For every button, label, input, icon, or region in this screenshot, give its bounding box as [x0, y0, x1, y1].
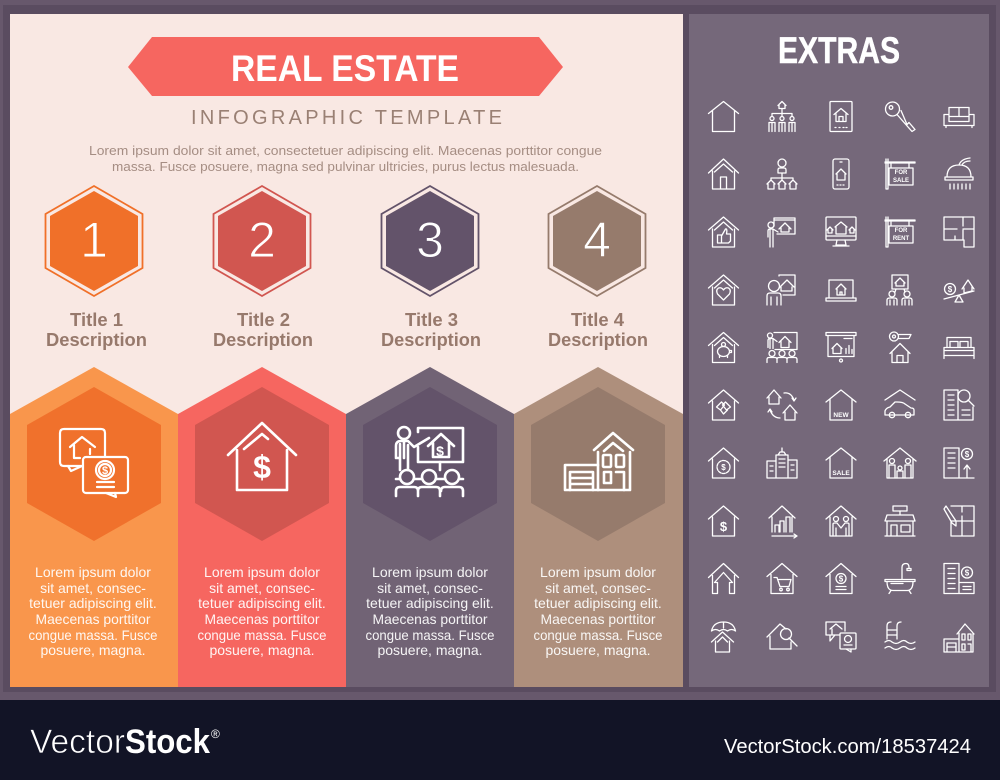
icon: building value rising: $	[965, 450, 970, 459]
icon: balance of money and house: $	[948, 285, 953, 294]
icon: house with gear dollar: $	[721, 463, 726, 472]
icon: for sale sign	[885, 159, 915, 189]
column 4 text: Lorem ipsum dolor	[540, 564, 656, 580]
icon: projector screen with chart	[826, 332, 856, 362]
icon: chat house and money	[826, 622, 856, 652]
step 2 hexagon: 2	[248, 212, 276, 268]
icon: new house	[826, 390, 856, 420]
icon: for sale sign: SALE	[893, 178, 909, 184]
icon: presenter with audience: $	[436, 443, 444, 459]
subtitle: INFOGRAPHIC TEMPLATE	[191, 107, 502, 129]
column 2 text: sit amet, consec-	[209, 580, 315, 596]
step 3 hexagon: 3	[416, 212, 444, 268]
column 2 text: Maecenas porttitor	[204, 611, 320, 627]
step titles	[46, 310, 648, 350]
step 4 hexagon	[548, 186, 646, 296]
icon: person presenting house	[768, 218, 795, 247]
icon: house with dollar	[228, 423, 296, 490]
column 1 text	[28, 564, 158, 658]
icon: buildings with coin	[944, 564, 974, 594]
icon: car under roof	[885, 390, 915, 418]
icon: family in house	[884, 448, 916, 478]
footer logo	[30, 723, 220, 761]
icon grid	[708, 102, 974, 652]
icon: house exchange arrows	[767, 390, 797, 420]
icon: chat about house and money: $	[102, 465, 108, 477]
panel: main cream panel	[10, 14, 683, 687]
icon: house with dollar small	[708, 506, 738, 536]
icon: key and house	[890, 332, 911, 362]
extras heading: EXTRAS	[778, 30, 900, 71]
icon: balance of money and house	[944, 280, 974, 302]
icon: bathtub	[885, 564, 915, 594]
column 4 text: Maecenas porttitor	[540, 611, 656, 627]
icon: house with dollar small: $	[720, 519, 728, 534]
column 2 text: tetuer adipiscing elit.	[198, 595, 326, 611]
column 1 text: congue massa. Fusce	[28, 627, 158, 643]
icon: new house: NEW	[833, 412, 849, 419]
step titles: Title 4	[571, 310, 624, 330]
icon: for rent sign: RENT	[893, 236, 909, 242]
step 1 hexagon	[46, 186, 142, 296]
icon: for rent sign: FOR	[895, 228, 908, 234]
column 4 text: congue massa. Fusce	[534, 627, 663, 643]
step titles: Description	[213, 330, 313, 350]
column 1: orange	[10, 367, 178, 687]
icon: house with garage small	[944, 624, 974, 652]
column 4 text	[534, 564, 663, 658]
column 2: coral	[178, 367, 346, 687]
footer logo: Vector	[30, 723, 125, 761]
column 1 text: Lorem ipsum dolor	[35, 564, 151, 580]
icon: tablet with house	[830, 102, 852, 132]
icon: house for sale: SALE	[832, 470, 850, 477]
footer band	[0, 700, 1000, 780]
icon: sofa	[944, 108, 974, 128]
footer logo: ®	[211, 727, 220, 741]
icon: house with coin	[826, 564, 856, 594]
step 3 hexagon	[382, 186, 478, 296]
column 4: taupe	[514, 367, 683, 687]
column 1 text: posuere, magna.	[40, 642, 146, 658]
column 1 text: Maecenas porttitor	[36, 611, 151, 627]
footer logo: Stock	[125, 723, 210, 761]
column 3 text: congue massa. Fusce	[366, 627, 495, 643]
icon: house with gear dollar	[708, 448, 738, 478]
icon: floor plan with pencil	[944, 506, 974, 536]
step titles: Title 1	[70, 310, 123, 330]
step titles: Description	[548, 330, 648, 350]
icon: chat about house and money	[60, 429, 128, 497]
icon: presentation to audience	[767, 332, 797, 362]
icon: house for sale	[826, 448, 856, 478]
column 3 text: Maecenas porttitor	[372, 611, 488, 627]
icon: house search	[767, 624, 797, 649]
icon: bed	[944, 338, 974, 358]
step 4 hexagon: 4	[583, 212, 611, 268]
icon: laptop with house	[826, 280, 856, 301]
icon: house with piggy bank	[708, 332, 738, 362]
icon: house with bar chart	[769, 506, 797, 538]
step titles: Description	[381, 330, 481, 350]
icon: city buildings	[767, 448, 797, 478]
icon: presenter with audience	[396, 427, 463, 496]
column 3 text: posuere, magna.	[377, 642, 483, 658]
icon: house under umbrella	[712, 622, 736, 652]
intro text	[89, 143, 602, 174]
column 1 text: sit amet, consec-	[40, 580, 146, 596]
column 3 text: Lorem ipsum dolor	[372, 564, 488, 580]
column 4 text: tetuer adipiscing elit.	[534, 595, 662, 611]
column 2 text	[198, 564, 327, 658]
icon: house with handshake	[708, 390, 738, 420]
icon: for rent sign	[885, 217, 915, 247]
icon: person with house board	[767, 275, 795, 305]
panel: extras	[689, 14, 989, 687]
icon: house with shopping cart	[767, 564, 797, 594]
column 1 text: tetuer adipiscing elit.	[29, 595, 157, 611]
icon: for sale sign: FOR	[895, 170, 908, 176]
icon: couple in house	[826, 506, 856, 536]
column 3 text: tetuer adipiscing elit.	[366, 595, 494, 611]
column 4 text: sit amet, consec-	[545, 580, 651, 596]
icon: house	[708, 102, 738, 132]
step titles: Title 2	[237, 310, 290, 330]
column 3: purple	[346, 367, 514, 687]
column 4 text: posuere, magna.	[545, 642, 651, 658]
icon: shower head	[945, 158, 973, 189]
column 3 text	[366, 564, 495, 658]
step titles: Description	[46, 330, 147, 350]
icon: shop	[885, 506, 915, 536]
icon: desktop monitor with houses	[826, 217, 856, 246]
title banner: REAL ESTATE	[231, 48, 459, 89]
icon: manager and houses	[767, 159, 797, 189]
column 2 text: congue massa. Fusce	[198, 627, 327, 643]
column 3 text: sit amet, consec-	[377, 580, 483, 596]
icon: house with garage	[565, 433, 633, 490]
intro text: massa. Fusce posuere, magna sed pulvinar ultricies, purus lectus malesuada.	[112, 159, 579, 174]
intro text: Lorem ipsum dolor sit amet, consectetuer adipiscing elit. Maecenas porttitor congue	[89, 143, 602, 158]
column 2 text: posuere, magna.	[209, 642, 315, 658]
step titles: Title 3	[405, 310, 458, 330]
icon: buildings with coin: $	[965, 568, 970, 578]
icon: house with dollar: $	[253, 449, 271, 485]
icon: house with up arrow	[708, 564, 738, 594]
icon: key	[886, 102, 915, 132]
icon: building value rising	[944, 448, 974, 478]
icon: house with thumbs up	[708, 217, 738, 247]
icon: swimming pool	[885, 622, 915, 650]
icon: house hierarchy with people	[769, 102, 795, 132]
column 2 text: Lorem ipsum dolor	[204, 564, 320, 580]
icon: building search	[944, 390, 974, 420]
icon: couple discussing house	[887, 275, 912, 305]
step 1 hexagon: 1	[80, 212, 108, 268]
footer url: VectorStock.com/18537424	[724, 736, 971, 758]
step 2 hexagon	[214, 186, 310, 296]
icon: smartphone with house	[833, 159, 849, 189]
icon: house with heart	[708, 275, 738, 305]
title banner	[128, 37, 563, 96]
icon: house with coin: $	[839, 574, 844, 584]
icon: house with door	[708, 159, 738, 189]
icon: floor plan	[944, 217, 974, 247]
